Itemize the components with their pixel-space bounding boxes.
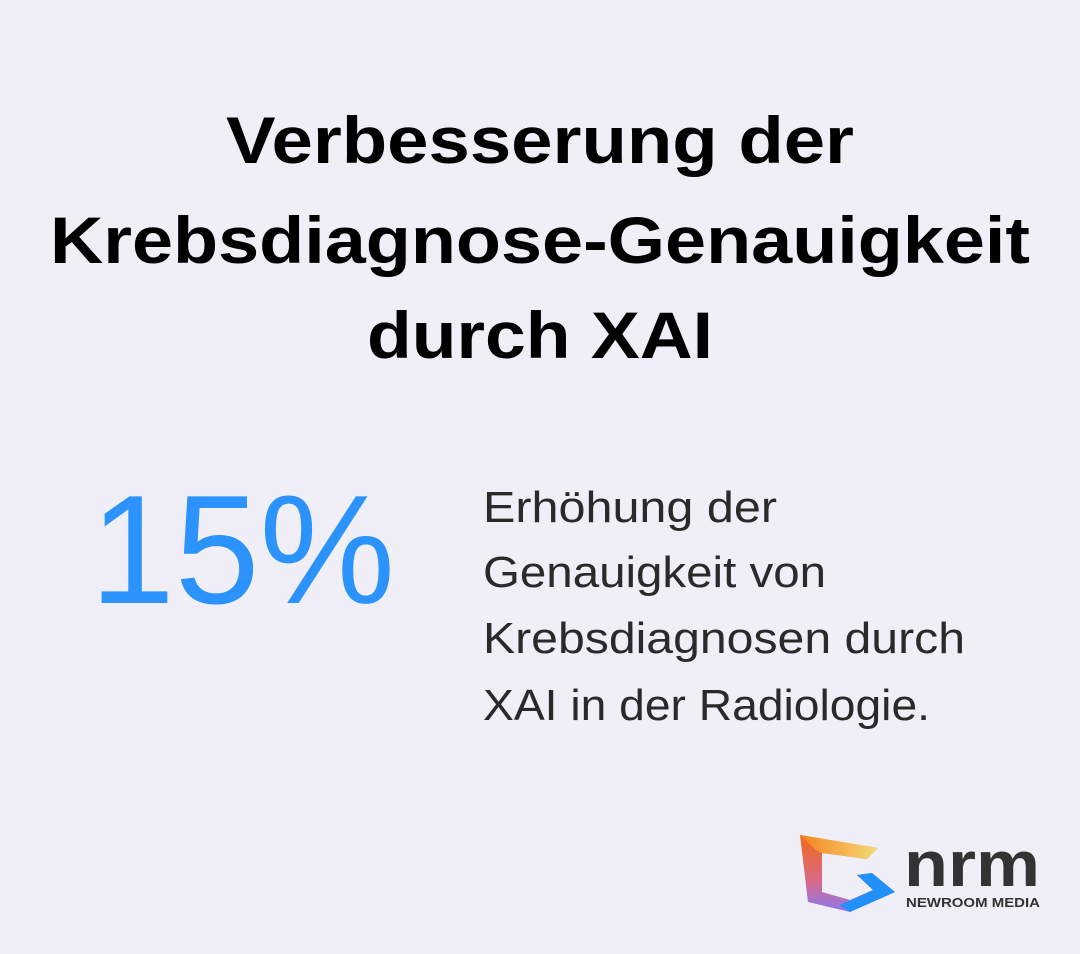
description text: XAI in der Radiologie. <box>483 681 930 730</box>
logo: nrm newroom media: nrm <box>904 828 1040 900</box>
title <box>50 103 1030 372</box>
title: Krebsdiagnose-Genauigkeit <box>50 203 1030 277</box>
description text: Krebsdiagnosen durch <box>483 614 965 663</box>
big number 15%: 15% <box>90 463 395 636</box>
logo: nrm newroom media <box>800 828 1041 912</box>
description text: Erhöhung der <box>483 483 777 532</box>
title: durch XAI <box>367 298 713 372</box>
logo: nrm newroom media: NEWROOM MEDIA <box>906 895 1041 910</box>
description text <box>483 483 965 730</box>
description text: Genauigkeit von <box>483 548 826 597</box>
title: Verbesserung der <box>226 103 854 177</box>
